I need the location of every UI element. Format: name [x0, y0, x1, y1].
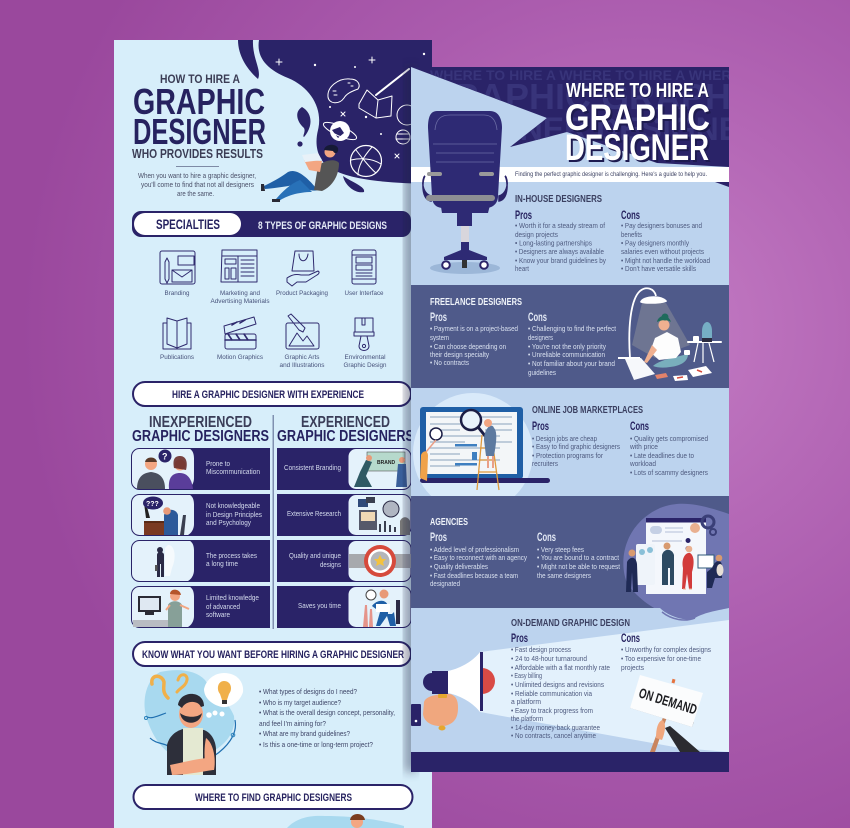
icon: ringed planet — [322, 121, 358, 141]
heading bar: know what you want — [133, 642, 411, 666]
column heading: experienced: EXPERIENCED — [301, 414, 390, 431]
heading bar: where to find: WHERE TO FIND GRAPHIC DESIGNERS — [195, 792, 352, 804]
text: Limited knowledge — [206, 595, 259, 602]
right panel: where to hire a graphic designer — [411, 67, 850, 772]
cons: • Might not handle the workload — [621, 256, 710, 265]
checklist questions: • What types of designs do I need? — [259, 687, 357, 696]
pros: • 14-day money-back guarantee — [511, 723, 600, 732]
column heading: inexperienced — [132, 416, 268, 441]
pros: • Easy to reconnect with an agency — [430, 553, 527, 562]
pros: • Know your brand guidelines by — [515, 256, 606, 265]
pros: • Reliable communication via — [511, 689, 593, 698]
icon: megaphone and hand — [411, 652, 495, 730]
pros: recruiters — [532, 459, 558, 468]
section: in-house designers: IN-HOUSE DESIGNERS — [515, 193, 602, 205]
intro band — [411, 167, 729, 182]
text: Consistent Branding — [284, 465, 341, 472]
title: where to hire a graphic designer: WHERE TO HIRE A — [567, 81, 710, 103]
column heading: experienced — [278, 416, 411, 441]
on demand sign held by hand — [630, 675, 703, 752]
dark header with pattern text — [411, 67, 850, 167]
pros: Pros — [511, 633, 528, 645]
section: online job marketplaces — [411, 388, 708, 513]
inexperienced cards — [132, 448, 270, 628]
label: Graphic Arts — [284, 354, 320, 361]
bottom illustration: where to find — [287, 814, 404, 828]
text: in Design Principles — [206, 512, 262, 519]
illustration: thinking man with question marks — [144, 670, 243, 775]
text: designs — [320, 562, 341, 569]
section: on-demand graphic design — [411, 608, 729, 752]
checklist questions: • Is this a one-time or long-term project? — [259, 740, 373, 749]
card: consistent branding: BRAND — [377, 460, 395, 466]
pros: • Easy billing — [511, 671, 542, 680]
title: where to hire a graphic designer: DESIGNER — [565, 126, 709, 168]
cons: • Not familiar about your brand — [528, 359, 615, 368]
card: extensive research — [277, 494, 411, 536]
card: prone to miscommunication — [132, 448, 270, 490]
card: quality and unique — [277, 540, 411, 582]
specialties bar — [132, 211, 411, 237]
cons: salaries even without projects — [621, 247, 704, 256]
cons: workload — [629, 459, 656, 468]
text: The process takes — [206, 553, 257, 560]
cons: guidelines — [528, 368, 556, 377]
pros: • Design jobs are cheap — [532, 434, 597, 443]
cons: • Too expensive for one-time — [621, 654, 701, 663]
checklist questions: • What is the overall design concept, personality, — [259, 708, 395, 717]
cons: benefits — [621, 230, 642, 239]
label: and Illustrations — [280, 362, 325, 369]
on demand sign held by hand: ON DEMAND — [637, 685, 699, 717]
heading bar: know what you want: KNOW WHAT YOU WANT BEFORE HIRING A GRAPHIC DESIGNER — [142, 649, 404, 661]
intro paragraph — [138, 172, 256, 196]
cons: the same designers — [537, 571, 591, 580]
text — [206, 503, 262, 527]
icon: branding — [160, 251, 195, 284]
cons: • Don't have versatile skills — [621, 264, 696, 273]
checklist questions: and feel I'm aiming for? — [259, 719, 326, 728]
text: Extensive Research — [287, 511, 341, 518]
card: process takes long — [132, 540, 270, 582]
cons: • You are bound to a contract — [537, 553, 619, 562]
column heading: inexperienced: GRAPHIC DESIGNERS — [132, 428, 269, 445]
pros: • Easy to find graphic designers — [532, 442, 620, 451]
pros: • Long-lasting partnerships — [515, 238, 592, 248]
intro paragraph: When you want to hire a graphic designer, — [138, 171, 256, 180]
cons: • Pay designers monthly — [621, 238, 689, 248]
text — [206, 461, 260, 474]
pros: designated — [430, 579, 460, 588]
pros: • Unlimited designs and revisions — [511, 680, 604, 689]
cons: • Unworthy for complex designs — [621, 645, 711, 654]
cons — [528, 312, 616, 377]
icon: paint brush — [354, 318, 374, 350]
pros — [515, 210, 606, 273]
cons: • Unreliable communication — [528, 350, 605, 359]
label: Motion Graphics — [217, 354, 264, 361]
title: how to hire a graphic designer: DESIGNER — [133, 111, 266, 152]
text: software — [206, 612, 230, 619]
pros: Pros — [430, 532, 447, 544]
title: where to hire a graphic designer: WHERE TO HIRE A — [566, 80, 709, 102]
pros: • Designers are always available — [515, 247, 604, 256]
pros: Pros — [532, 421, 549, 433]
cons: Cons — [537, 532, 556, 544]
label: Advertising Materials — [210, 298, 270, 305]
text: and Psychology — [206, 520, 251, 527]
section: agencies — [411, 496, 729, 616]
pros: the platform — [511, 714, 543, 723]
icon: marketing materials — [221, 250, 257, 282]
section: agencies: AGENCIES — [430, 516, 468, 528]
label — [280, 354, 324, 367]
text: Miscommunication — [206, 469, 260, 476]
person reading tablet — [261, 145, 339, 202]
title: where to hire a graphic designer: GRAPHIC — [567, 98, 712, 140]
card: not knowledgeable: ??? — [146, 501, 159, 508]
card: saves time — [277, 586, 411, 628]
cons — [537, 532, 620, 580]
label — [210, 290, 270, 305]
pros: • No contracts, cancel anytime — [511, 731, 596, 740]
icon: product packaging — [287, 251, 319, 286]
label: Publications — [160, 354, 195, 361]
pros — [511, 633, 610, 740]
icon: graphic arts — [286, 314, 319, 349]
text: of advanced — [206, 604, 240, 611]
label: Environmental — [344, 354, 386, 361]
cons: • Lots of scammy designers — [630, 468, 708, 477]
pros: • No contracts — [430, 358, 469, 367]
title: how to hire a graphic designer: GRAPHIC — [133, 81, 265, 122]
text: Saves you time — [298, 603, 341, 610]
pros: their design specialty — [430, 350, 489, 359]
icon: user interface — [352, 250, 376, 284]
label: Marketing and — [220, 290, 260, 297]
left panel: how to hire a graphic designer — [114, 40, 432, 828]
pros — [430, 312, 518, 367]
cons — [621, 633, 711, 672]
title: how to hire a graphic designer: HOW TO HIRE A — [160, 72, 240, 86]
pros: • Fast design process — [511, 645, 571, 654]
checklist questions: • What are my brand guidelines? — [259, 729, 350, 738]
cons: with price — [629, 442, 658, 451]
cons: • Late deadlines due to — [630, 451, 694, 460]
text: Quality and unique — [289, 553, 341, 560]
checklist questions: • Who is my target audience? — [259, 698, 341, 707]
dark night-sky blob with illustration — [238, 40, 432, 202]
section: freelance designers: FREELANCE DESIGNERS — [430, 296, 522, 308]
card: consistent branding — [277, 448, 411, 490]
card: not knowledgeable — [132, 494, 270, 536]
specialties icon grid — [160, 250, 387, 369]
text — [289, 553, 341, 569]
pros: system — [430, 333, 449, 342]
illustration: laptop with magnifying glass — [420, 407, 550, 490]
illustration: agency team with screen — [623, 504, 729, 616]
column heading: experienced: GRAPHIC DESIGNERS — [277, 428, 414, 445]
icon: small planet — [396, 104, 411, 144]
title: where to hire a graphic designer: DESIGNER — [567, 128, 711, 170]
icon: basketball — [350, 146, 382, 176]
text: Prone to — [206, 461, 230, 468]
cons: designers — [528, 333, 553, 342]
checklist questions — [259, 687, 395, 749]
text: a long time — [206, 561, 238, 568]
text — [206, 595, 259, 619]
pros: a platform — [511, 697, 541, 706]
cons — [629, 421, 708, 477]
footer band — [411, 752, 729, 772]
cons: • Pay designers bonuses and — [621, 221, 702, 230]
cons: Cons — [528, 312, 547, 324]
specialties bar: SPECIALTIES — [156, 217, 220, 232]
pros: • Fast deadlines because a team — [430, 571, 518, 580]
icon: office chair — [423, 111, 507, 274]
pros: • Added level of professionalism — [430, 545, 519, 554]
cons: Cons — [621, 633, 640, 645]
title: where to hire a graphic designer: GRAPHIC — [565, 96, 710, 138]
pros: design projects — [515, 230, 558, 239]
section: on-demand graphic design: ON-DEMAND GRAPHIC DESIGN — [511, 617, 630, 629]
title: how to hire a graphic designer — [132, 72, 266, 161]
card: prone to miscommunication: ? — [162, 452, 168, 462]
column heading: inexperienced: INEXPERIENCED — [149, 414, 252, 431]
pros: • Easy to track progress from — [511, 706, 593, 715]
section: online job marketplaces: ONLINE JOB MARKETPLACES — [532, 404, 643, 416]
label: Product Packaging — [276, 290, 328, 297]
heading bar: hire with experience: HIRE A GRAPHIC DESIGNER WITH EXPERIENCE — [172, 389, 364, 401]
cons: • Quality gets compromised — [630, 434, 708, 443]
card: limited knowledge — [132, 586, 270, 628]
cons — [621, 210, 710, 273]
intro paragraph: are the same. — [177, 189, 214, 198]
title: how to hire a graphic designer: WHO PROVIDES RESULTS — [132, 147, 263, 161]
pros: • Worth it for a steady stream of — [515, 221, 606, 230]
pros: • Quality deliverables — [430, 562, 488, 571]
icon: clapperboard — [224, 317, 256, 349]
label: Branding — [164, 290, 190, 297]
illustration: woman at laptop under lamp — [618, 288, 722, 381]
pros: • Protection programs for — [532, 451, 603, 460]
cons: • Very steep fees — [537, 545, 584, 554]
cons: projects — [621, 663, 644, 672]
icon: game controller — [328, 79, 359, 103]
label — [344, 354, 387, 369]
text — [206, 553, 257, 568]
section: freelance designers — [411, 285, 729, 388]
pros: Pros — [515, 210, 532, 222]
pros — [430, 532, 527, 588]
pros: Pros — [430, 312, 447, 324]
specialties bar: 8 TYPES OF GRAPHIC DESIGNS — [258, 220, 387, 232]
section: in-house designers — [515, 193, 710, 273]
intro paragraph: you'll come to find that not all designers — [141, 180, 254, 189]
icon: publications — [163, 318, 191, 349]
heading bar: hire with experience — [133, 382, 411, 406]
heading bar: where to find — [134, 785, 412, 809]
cons: Cons — [630, 421, 649, 433]
label: Graphic Design — [344, 362, 387, 369]
pros: • 24 to 48-hour turnaround — [511, 654, 587, 663]
cons: • Challenging to find the perfect — [528, 324, 616, 333]
experienced cards — [277, 448, 411, 628]
pros — [532, 421, 620, 468]
cons: Cons — [621, 210, 640, 222]
icon: open book and pencil — [359, 69, 409, 118]
label: User Interface — [344, 290, 384, 297]
pros: • Affordable with a flat monthly rate — [511, 663, 610, 672]
pros: • Can choose depending on — [430, 342, 506, 351]
title: where to hire a graphic designer — [565, 80, 712, 170]
text: Not knowledgeable — [206, 503, 260, 510]
pros: • Payment is on a project-based — [430, 324, 518, 333]
shadow of right panel — [405, 67, 417, 772]
intro band: Finding the perfect graphic designer is challenging. Here's a guide to help you. — [515, 171, 707, 178]
cons: • You're not the only priority — [528, 342, 606, 351]
pros: heart — [515, 264, 529, 273]
cons: • Might not be able to request — [537, 562, 620, 571]
